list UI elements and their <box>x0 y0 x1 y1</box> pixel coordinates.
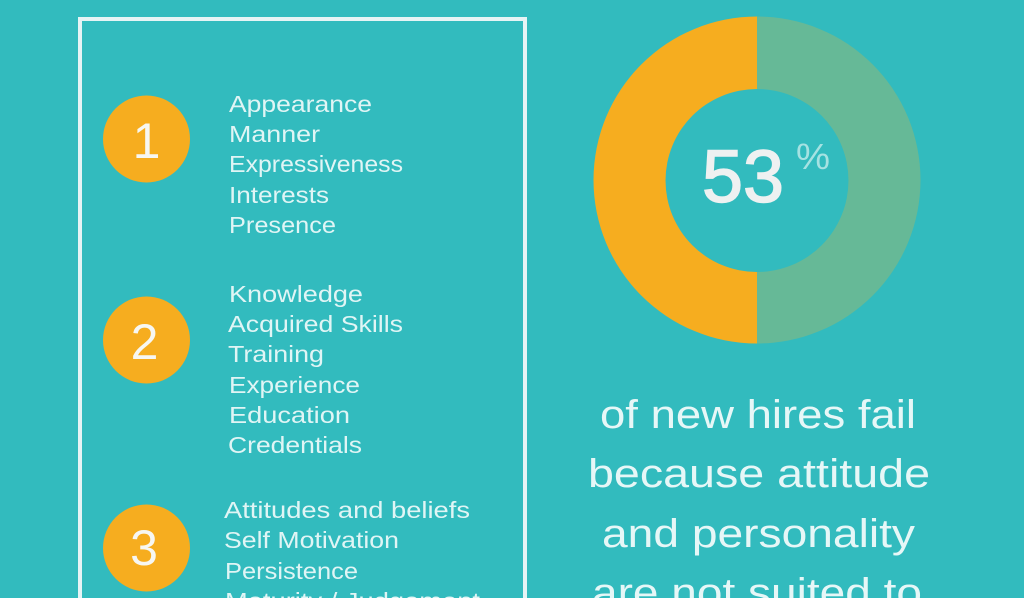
text block: group 1 attributes: Appearance <box>229 91 372 117</box>
text block: group 3 attributes: Persistence <box>225 558 358 584</box>
text block: group 1 attributes: Manner <box>229 121 320 147</box>
text block: statistic caption: and personality <box>602 512 915 556</box>
badge: number 3: 3 <box>130 520 158 576</box>
badge: number 2 <box>103 296 190 384</box>
value: 53: 53 <box>702 135 784 218</box>
donut chart: 53 percent <box>594 16 920 344</box>
text block: group 2 attributes: Knowledge <box>229 281 363 307</box>
text block: group 3 attributes: Attitudes and beliefs <box>224 497 470 523</box>
text block: group 2 attributes: Credentials <box>228 432 362 458</box>
text block: group 2 attributes: Experience <box>229 372 360 398</box>
badge: number 3 <box>103 504 190 592</box>
unit: percent sign: % <box>796 136 830 177</box>
badge: number 1: 1 <box>133 113 160 169</box>
text block: group 3 attributes <box>224 497 481 598</box>
text block: statistic caption <box>588 393 930 598</box>
panel: numbered attribute list <box>80 19 525 598</box>
text block: statistic caption: of new hires fail <box>600 393 916 437</box>
text block: group 2 attributes: Training <box>228 341 324 367</box>
text block: group 1 attributes: Expressiveness <box>229 151 403 177</box>
text block: group 1 attributes <box>229 91 403 238</box>
badge: number 1 <box>103 96 190 182</box>
text block: group 2 attributes: Education <box>229 402 350 428</box>
text block: group 3 attributes: Self Motivation <box>224 527 399 553</box>
badge: number 2: 2 <box>131 314 158 370</box>
text block: group 2 attributes <box>228 281 403 458</box>
text block: group 1 attributes: Interests <box>229 182 329 208</box>
text block: statistic caption: because attitude <box>588 452 930 496</box>
text block: group 1 attributes: Presence <box>229 212 336 238</box>
text block: group 2 attributes: Acquired Skills <box>228 311 403 337</box>
